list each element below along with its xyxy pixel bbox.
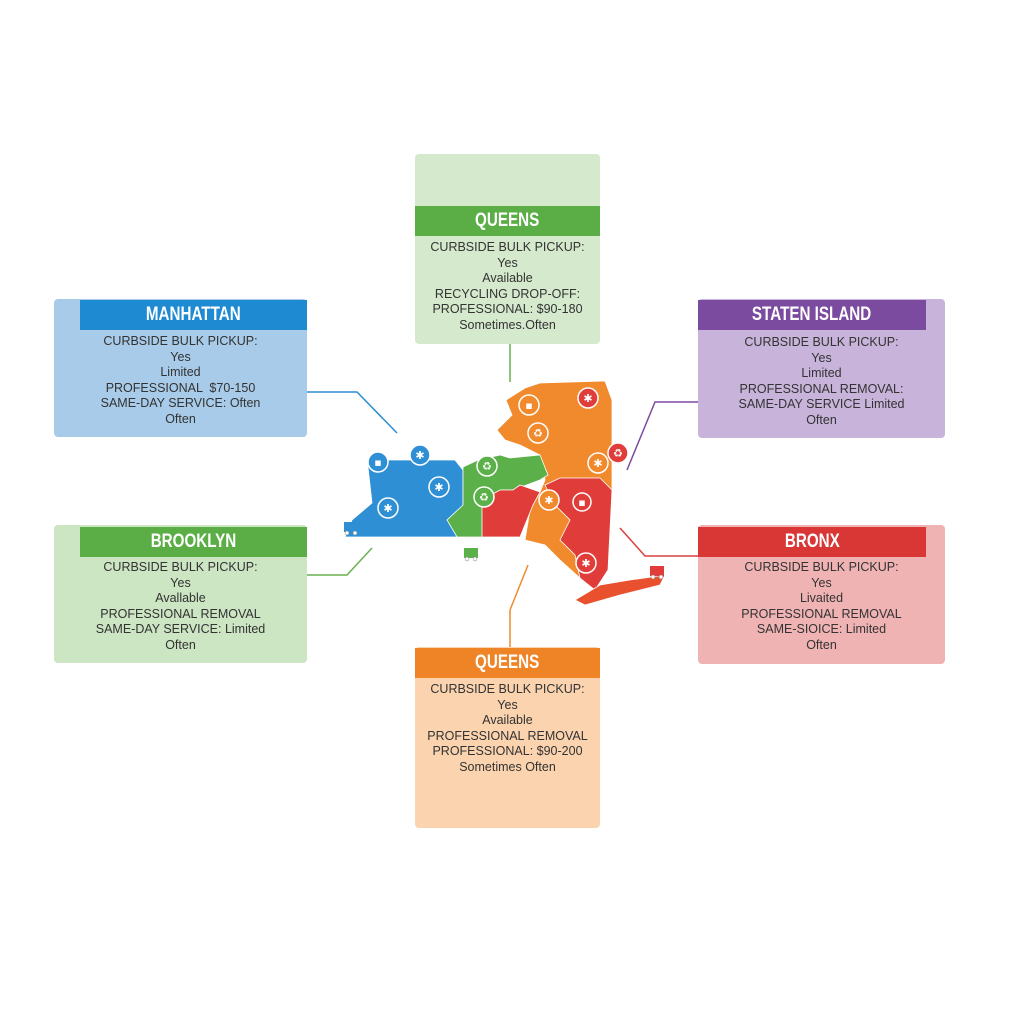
heading	[415, 648, 600, 678]
connectors and map: ♻	[533, 427, 543, 440]
text block	[101, 334, 260, 426]
text block: Limited	[160, 365, 201, 379]
connectors and map: ✱	[581, 557, 591, 570]
text block: Available	[482, 713, 533, 727]
map: New York state regions	[345, 381, 665, 605]
text block: Yes	[811, 576, 832, 590]
text block: PROFESSIONAL REMOVAL	[427, 728, 588, 742]
panel: Queens top	[415, 154, 600, 344]
heading	[698, 300, 926, 330]
text block: PROFESSIONAL REMOVAL:	[740, 382, 903, 396]
text block: CURBSIDE BULK PICKUP:	[430, 682, 585, 696]
heading: QUEENS	[475, 210, 540, 231]
text block: SAME-SIOICE: Limited	[757, 622, 886, 636]
text block: Often	[806, 412, 837, 426]
text block: PROFESSIONAL $70-150	[106, 380, 255, 394]
connectors and map: ▪	[525, 399, 533, 412]
connectors and map: ✱	[434, 481, 444, 494]
connectors and map: ▪	[578, 496, 586, 509]
connectors and map: ✱	[415, 449, 425, 462]
panel: Brooklyn	[54, 525, 307, 663]
text block: RECYCLING DROP-OFF:	[435, 286, 580, 300]
text block: Yes	[497, 698, 518, 712]
text block: Often	[806, 638, 837, 652]
connectors and map: ♻	[479, 491, 489, 504]
heading	[80, 527, 307, 557]
text block: CURBSIDE BULK PICKUP:	[744, 335, 899, 349]
connectors and map: ♻	[613, 447, 623, 460]
text block: Often	[165, 638, 196, 652]
heading: MANHATTAN	[146, 304, 241, 325]
text block: Often	[165, 412, 196, 426]
text block: SAME-DAY SERVICE: Often	[101, 396, 260, 410]
text block	[427, 682, 588, 774]
text block: CURBSIDE BULK PICKUP:	[744, 560, 899, 574]
heading	[415, 206, 600, 236]
connectors and map: ✱	[583, 392, 593, 405]
heading	[80, 300, 307, 330]
trucks	[344, 515, 664, 579]
heading	[698, 527, 926, 557]
heading: QUEENS	[475, 652, 540, 673]
heading: BROOKLYN	[151, 531, 236, 552]
text block: Yes	[811, 350, 832, 364]
connectors and map: ✱	[383, 502, 393, 515]
text block	[738, 335, 905, 426]
text block	[96, 560, 265, 652]
heading: BRONX	[785, 531, 839, 552]
connectors and map: ✱	[544, 494, 554, 507]
panel: Bronx	[698, 525, 945, 664]
text block: Livaited	[800, 591, 843, 605]
panel: Queens bottom	[415, 647, 600, 828]
text block: CURBSIDE BULK PICKUP:	[430, 240, 585, 254]
text block	[430, 240, 585, 332]
text block: Available	[482, 271, 533, 285]
connector lines	[307, 344, 698, 647]
text block: CURBSIDE BULK PICKUP:	[103, 560, 258, 574]
text block	[741, 560, 902, 652]
text block: CURBSIDE BULK PICKUP:	[103, 334, 258, 348]
text block: PROFESSIONAL REMOVAL	[741, 606, 902, 620]
panel: Manhattan	[54, 299, 307, 437]
text block: Yes	[170, 576, 191, 590]
text block: Limited	[801, 366, 842, 380]
heading: STATEN ISLAND	[752, 304, 872, 325]
text block: PROFESSIONAL REMOVAL	[100, 606, 261, 620]
text block: Sometimes Often	[459, 760, 556, 774]
text block: Sometimes.Often	[459, 318, 556, 332]
text block: PROFESSIONAL: $90-180	[432, 302, 583, 316]
text block: SAME-DAY SERVICE Limited	[738, 397, 905, 411]
text block: Yes	[497, 256, 518, 270]
connectors and map: ♻	[482, 460, 492, 473]
panel: Staten Island	[698, 299, 945, 438]
connectors and map: ✱	[593, 457, 603, 470]
text block: PROFESSIONAL: $90-200	[432, 744, 583, 758]
connectors and map: ▪	[374, 456, 382, 469]
map pins	[368, 388, 628, 573]
text block: Avallable	[155, 591, 206, 605]
text block: Yes	[170, 350, 191, 364]
text block: SAME-DAY SERVICE: Limited	[96, 622, 265, 636]
